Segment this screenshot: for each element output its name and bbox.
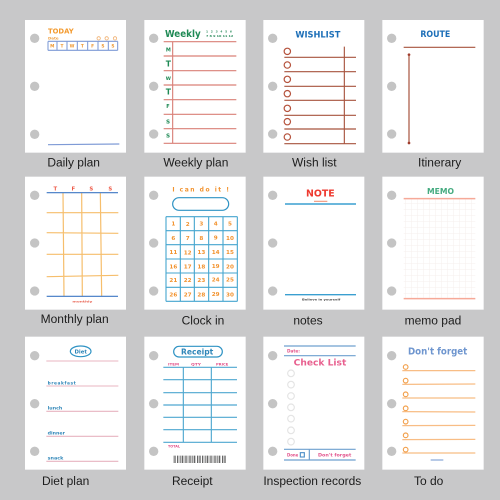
panel: clock in: [144, 177, 246, 327]
panel: notes: notes: [293, 313, 323, 327]
panel: monthly plan: F: [72, 186, 76, 192]
panel: clock in: 30: [226, 292, 234, 298]
panel: clock in: 27: [184, 292, 192, 298]
panel: inspection records: Inspection records: [263, 474, 361, 488]
panel: receipt: [144, 337, 246, 488]
panel: diet plan: [25, 337, 126, 488]
panel: diet plan: lunch: [48, 406, 62, 412]
panel: clock in: 13: [197, 250, 205, 256]
panel: itinerary: [382, 20, 484, 170]
panel: memo pad: [382, 177, 484, 327]
panel: weekly plan: S: [166, 134, 170, 140]
panel: clock in: 29: [212, 292, 220, 298]
panel: daily plan: T: [81, 44, 84, 50]
panel: itinerary: ROUTE: [420, 30, 450, 40]
panel: daily plan: [25, 20, 126, 170]
panel: monthly plan: Monthly plan: [41, 312, 109, 326]
panel: to do: Don't forget: [408, 347, 468, 358]
panel: inspection records: [263, 337, 364, 488]
panel: monthly plan: [25, 177, 126, 326]
panel: clock in: 15: [226, 250, 234, 256]
panel: to do: [382, 337, 484, 488]
panel: weekly plan: Weekly plan: [163, 156, 228, 170]
panel: weekly plan: F: [166, 104, 170, 110]
panel: weekly plan: T: [166, 88, 172, 97]
panel: inspection records: Don't forget: [318, 452, 351, 457]
panel: inspection records: Date:: [287, 349, 300, 354]
panel: clock in: 10: [226, 236, 234, 242]
panel: receipt: TOTAL: [168, 444, 181, 448]
panel: clock in: 11: [169, 250, 177, 256]
panel: daily plan: F: [91, 44, 94, 50]
panel: clock in: 22: [184, 278, 192, 284]
panel: clock in: 14: [212, 250, 220, 256]
panel: clock in: 21: [169, 278, 177, 284]
panel: clock in: 25: [226, 278, 234, 284]
panel: clock in: 4: [214, 221, 218, 227]
panel: weekly plan: M: [166, 47, 171, 53]
panel: daily plan: T: [61, 44, 64, 50]
panel: weekly plan: S: [166, 119, 170, 125]
panel: clock in: 16: [169, 264, 177, 270]
panel: itinerary: Itinerary: [418, 156, 461, 170]
panel: wish list: Wish list: [292, 156, 337, 170]
panel: clock in: 3: [199, 222, 203, 228]
panel: receipt: Receipt: [181, 347, 214, 356]
panel: daily plan: S: [101, 44, 105, 50]
panel: monthly plan: monthly: [72, 299, 92, 303]
panel: to do: To do: [414, 474, 444, 488]
panel: diet plan: breakfast: [48, 381, 76, 387]
panel: monthly plan: S: [89, 187, 93, 193]
panel: clock in: 28: [197, 292, 205, 298]
panel: clock in: 12: [184, 250, 192, 256]
panel: clock in: 1: [171, 222, 175, 228]
panel: weekly plan: T: [166, 59, 172, 68]
panel: diet plan: Diet plan: [42, 474, 89, 488]
panel: wish list: WISHLIST: [295, 31, 340, 41]
panel: clock in: I can do it !: [172, 186, 229, 193]
panel: weekly plan: 7 8 9 10 11 12: [206, 34, 233, 38]
panel: clock in: 19: [212, 264, 220, 270]
panel: memo pad: memo pad: [405, 313, 461, 327]
panel: clock in: 24: [212, 277, 220, 283]
panel: diet plan: Diet: [74, 349, 87, 355]
panel: diet plan: snack: [48, 456, 63, 462]
panel: notes: [263, 177, 364, 327]
panel: weekly plan: [144, 20, 246, 170]
panel: daily plan: Daily plan: [47, 156, 100, 170]
panel: daily plan: S: [111, 44, 115, 50]
panel: clock in: 8: [199, 236, 203, 242]
panel: clock in: 26: [169, 292, 177, 298]
panel: clock in: Clock in: [182, 313, 224, 327]
panel: clock in: 6: [171, 236, 175, 242]
panel: daily plan: TODAY: [48, 27, 74, 36]
panel: clock in: 9: [214, 236, 218, 242]
panel: clock in: 17: [184, 264, 192, 270]
panel: monthly plan: T: [54, 186, 58, 192]
panel: clock in: 23: [197, 278, 205, 284]
panel: notes: NOTE: [306, 189, 335, 200]
panel: notes: Believe in yourself: [302, 298, 341, 302]
panel: receipt: ITEM: [168, 362, 179, 366]
panel: receipt: PRICE: [216, 362, 229, 366]
panel: clock in: 5: [228, 222, 232, 228]
panel: weekly plan: W: [166, 76, 171, 82]
panel: monthly plan: S: [108, 187, 112, 193]
panel: clock in: 18: [197, 264, 205, 270]
panel: daily plan: Date: [48, 37, 60, 41]
panel: diet plan: dinner: [48, 431, 66, 437]
panel: clock in: 7: [186, 236, 190, 242]
panel: clock in: 2: [186, 222, 190, 228]
panel: wish list: [263, 20, 364, 170]
panel: daily plan: M: [50, 44, 54, 50]
panel: clock in: 20: [226, 265, 234, 271]
panel: inspection records: Check List: [294, 359, 346, 369]
panel: inspection records: Done: [287, 452, 299, 457]
panel: receipt: QTY: [191, 362, 201, 366]
panel: memo pad: MEMO: [427, 187, 454, 196]
panel: daily plan: W: [70, 44, 75, 50]
panel: weekly plan: 1 2 3 4 5 6: [206, 30, 232, 34]
panel: weekly plan: Weekly: [165, 29, 201, 40]
panel: receipt: Receipt: [172, 474, 213, 488]
